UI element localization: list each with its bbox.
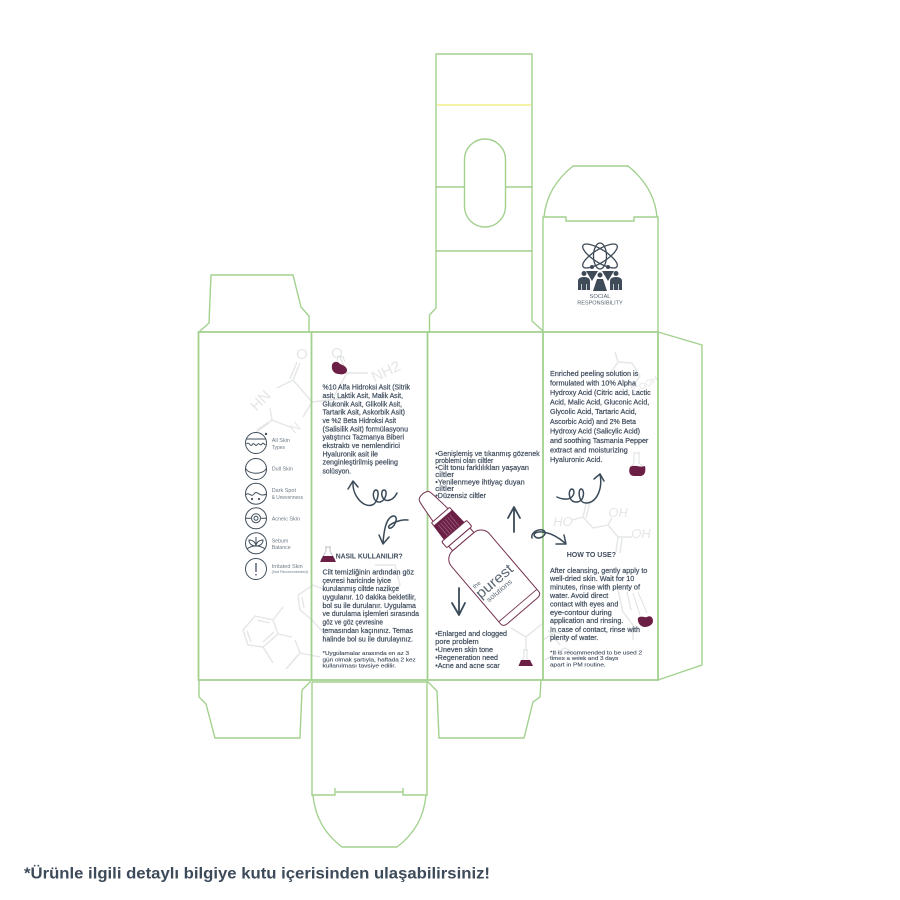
text block: Turkish target skin list xyxy=(435,449,540,500)
arrow: curly pointing right xyxy=(532,530,566,544)
bottle collar xyxy=(442,520,472,548)
molecule watermark: upper left xyxy=(247,345,403,436)
dieline: left top flap xyxy=(199,275,309,332)
icon: acneic skin xyxy=(246,508,266,529)
text block: English target skin list: •Acne and acne scar xyxy=(435,661,500,670)
text block: English usage: After cleansing, gently apply to xyxy=(550,566,647,575)
molecule watermark: upper left: O xyxy=(331,345,343,362)
text block: English description: extract and moisturizing xyxy=(550,446,628,454)
icon: irritated skin warning xyxy=(246,558,266,580)
illustration: serum bottle xyxy=(404,478,541,627)
text block: English usage: minutes, rinse with plenty of xyxy=(550,582,640,592)
text block: Turkish usage: temasından kaçınınız. Temas xyxy=(322,626,413,635)
label: acneic skin: Acneic Skin xyxy=(272,516,300,522)
note: English frequency: apart in PM routine. xyxy=(550,662,606,668)
text block: English usage: water. Avoid direct xyxy=(549,591,608,600)
text block: English usage: In case of contact, rinse with xyxy=(550,625,640,634)
note: Turkish frequency xyxy=(322,651,416,670)
dieline: bottom centre panel and tuck flap xyxy=(312,682,427,847)
note: English frequency: times a week and 3 days xyxy=(550,656,618,662)
footer note: *Ürünle ilgili detaylı bilgiye kutu içerisinden ulaşabilirsiniz! xyxy=(24,864,490,882)
text block: Turkish description: %10 Alfa Hidroksi Asit (Sitrik xyxy=(322,382,410,392)
text block: Turkish target skin list: •Düzensiz ciltler xyxy=(435,491,487,500)
text block: Turkish description: Tartarik Asit, Askorbik Asit) xyxy=(322,408,405,417)
text block: Turkish usage: halinde bol su ile durulayınız. xyxy=(322,634,413,644)
text block: Turkish usage: çevresi haricinde iyice xyxy=(322,576,391,585)
text block: Turkish target skin list: ciltler xyxy=(435,470,455,479)
molecule watermark: upper right: OH xyxy=(608,505,628,520)
wine coloured cap xyxy=(433,510,464,539)
label: dull skin: Dull Skin xyxy=(272,467,293,473)
dieline: box panels xyxy=(198,332,658,680)
label: social responsibility: SOCIAL xyxy=(590,294,610,300)
icon: dark spot and unevenness xyxy=(246,483,266,504)
heading: How to use: HOW TO USE? xyxy=(567,550,616,559)
text block: Turkish description xyxy=(322,382,410,475)
icon: social responsibility xyxy=(578,240,622,291)
dieline: top centre panels xyxy=(430,54,543,332)
icon: flask top right xyxy=(629,453,645,476)
text block: Turkish usage: uygulanır. 10 dakika bekletilir, xyxy=(322,592,416,602)
text block: English description xyxy=(550,369,651,464)
text block: Turkish description: yatıştırıcı Tazmanya Biberi xyxy=(322,433,404,442)
arrow: curly up left xyxy=(348,481,397,505)
icon: flask blob top left xyxy=(332,356,347,374)
label: social responsibility: RESPONSIBILITY xyxy=(577,301,623,307)
icon: sebum balance xyxy=(246,533,266,554)
text block: Turkish usage: kurulanmış ciltde nazikçe xyxy=(322,584,399,593)
text block: Turkish usage: ve durulama işlemleri sırasında xyxy=(322,609,419,618)
text block: Turkish target skin list: •Cilt tonu farklılıkları yaşayan xyxy=(435,463,529,472)
molecule watermark: lower left xyxy=(243,565,400,669)
text block: English target skin list xyxy=(435,629,507,670)
text block: Turkish description: ekstraktı ve nemlendirici xyxy=(322,441,400,450)
dropper bulb xyxy=(415,487,449,523)
note: Turkish frequency: *Uygulamalar arasında en az 3 xyxy=(322,651,410,657)
molecule watermark: upper left: N xyxy=(287,419,304,436)
dieline: upper right panel and tuck flap xyxy=(543,166,658,332)
label: social responsibility xyxy=(577,294,623,307)
text block: English description: Hydroxy Acid (Citric acid, Lactic xyxy=(550,388,651,397)
molecule watermark: upper right: HO xyxy=(553,514,573,529)
text block: Turkish target skin list: •Yenilenmeye ihtiyaç duyan xyxy=(435,478,525,486)
text block: English target skin list: •Enlarged and clogged xyxy=(435,629,507,638)
text block: English usage: well-dried skin. Wait for 10 xyxy=(549,574,634,583)
brand name xyxy=(471,559,521,607)
note: English frequency xyxy=(550,650,642,668)
text block: English target skin list: •Uneven skin tone xyxy=(435,645,493,654)
panel: skin type icons xyxy=(246,432,309,580)
text block: English usage xyxy=(549,566,647,642)
label: all skin types: Types xyxy=(272,445,285,451)
text block: English target skin list: •Regeneration need xyxy=(435,653,498,662)
text block: Turkish description: solüsyon. xyxy=(322,466,351,475)
text block: English usage: eye-contour during xyxy=(550,608,612,617)
text block: English description: Hydroxy Acid (Salicylic Acid) xyxy=(550,426,640,436)
bottle body xyxy=(444,525,541,627)
text block: English description: Enriched peeling solution is xyxy=(550,369,639,378)
molecule watermark: upper left: O xyxy=(296,346,308,363)
text block: Turkish description: ve %2 Beta Hidroksi Asit xyxy=(322,416,396,425)
text block: English description: formulated with 10% Alpha xyxy=(550,378,636,388)
text block: English usage: contact with eyes and xyxy=(550,600,618,608)
note: English frequency: *It is recommended to be used 2 xyxy=(550,650,642,656)
arrow: curly up right xyxy=(557,474,604,503)
text block: English description: Ascorbic Acid) and 2% Beta xyxy=(550,417,636,426)
thumb slot xyxy=(464,139,506,227)
brand name: solutions xyxy=(486,578,514,604)
icon: dull skin xyxy=(246,458,266,480)
arrow: up xyxy=(508,507,520,532)
molecule watermark: upper right: COOH xyxy=(631,374,660,395)
molecule watermark: upper left: HN xyxy=(247,387,274,414)
label: all skin types: All Skin xyxy=(272,438,290,444)
text block: Turkish usage xyxy=(322,568,419,644)
label: sebum balance: Balance xyxy=(272,545,291,551)
molecule watermark: upper right: OH xyxy=(631,526,651,541)
dieline: bottom right flap xyxy=(427,680,541,738)
icon: flask bottom centre xyxy=(518,650,533,666)
brand name: the xyxy=(472,580,483,591)
cap ring xyxy=(431,507,452,526)
text block: Turkish description: Hyaluronik asit ile xyxy=(322,449,378,458)
text block: Turkish target skin list: ciltler xyxy=(435,484,455,493)
text block: Turkish description: asit, Laktik Asit, Malik Asit, xyxy=(322,391,403,400)
note: Turkish frequency: gün olmak şartıyla, haftada 2 kez xyxy=(322,658,416,664)
text block: Turkish target skin list: problemi olan ciltler xyxy=(435,456,494,465)
text block: English target skin list: pore problem xyxy=(435,637,479,646)
arrow: down xyxy=(452,588,465,615)
label: dark spot and unevenness xyxy=(272,488,303,501)
text block: Turkish usage: Cilt temizliğinin ardından göz xyxy=(322,568,414,576)
arrow: curly down left xyxy=(379,516,408,544)
dieline: bottom left flap xyxy=(199,680,311,738)
dieline: right glue flap xyxy=(658,332,702,680)
label: dark spot and unevenness: Dark Spot xyxy=(272,488,296,494)
icon: all skin types xyxy=(246,432,267,454)
label: dark spot and unevenness: & Unevenness xyxy=(272,495,303,501)
molecule watermark: lower centre and right xyxy=(511,590,633,660)
label: irritated skin xyxy=(272,564,309,574)
text block: Turkish usage: bol su ile durulanır. Uygulama xyxy=(322,601,416,610)
text block: English description: and soothing Tasmania Pepper xyxy=(550,436,649,445)
text block: English description: Hyaluronic Acid. xyxy=(550,455,602,464)
label: irritated skin: Irritated Skin xyxy=(272,564,303,570)
text block: English usage: plenty of water. xyxy=(550,633,598,642)
label: all skin types xyxy=(272,438,290,451)
label: sebum balance: Sebum xyxy=(272,538,289,544)
heading: Nasıl Kullanılır: NASIL KULLANILIR? xyxy=(336,552,403,560)
text block: Turkish description: (Salisilik Asit) formülasyonu xyxy=(322,424,408,433)
molecule watermark: upper left: NH2 xyxy=(369,358,403,386)
icon: flask bottom right xyxy=(633,592,653,627)
text block: English usage: application and rinsing. xyxy=(550,616,623,625)
molecule watermark: upper right xyxy=(551,352,660,553)
text block: English description: Acid, Malic Acid, Gluconic Acid, xyxy=(550,398,649,406)
text block: Turkish description: Glukonik Asit, Glikolik Asit, xyxy=(322,399,402,408)
note: Turkish frequency: kullanılması tavsiye edilir. xyxy=(322,664,396,670)
text block: English description: Glycolic Acid, Tartaric Acid, xyxy=(550,407,637,416)
text block: Turkish target skin list: •Genişlemiş ve tıkanmış gözenek xyxy=(435,449,540,458)
molecule watermark: upper right: HO xyxy=(551,432,566,446)
text block: Turkish description: zenginleştirilmiş peeling xyxy=(322,458,398,467)
label: irritated skin: (Not Recommended) xyxy=(272,570,309,574)
text block: Turkish usage: göz ve göz çevresine xyxy=(322,618,383,626)
icon: flask beside usage heading xyxy=(320,547,336,562)
brand name: purest xyxy=(473,561,517,602)
label: sebum balance xyxy=(272,538,291,551)
bottle neck xyxy=(449,528,474,551)
